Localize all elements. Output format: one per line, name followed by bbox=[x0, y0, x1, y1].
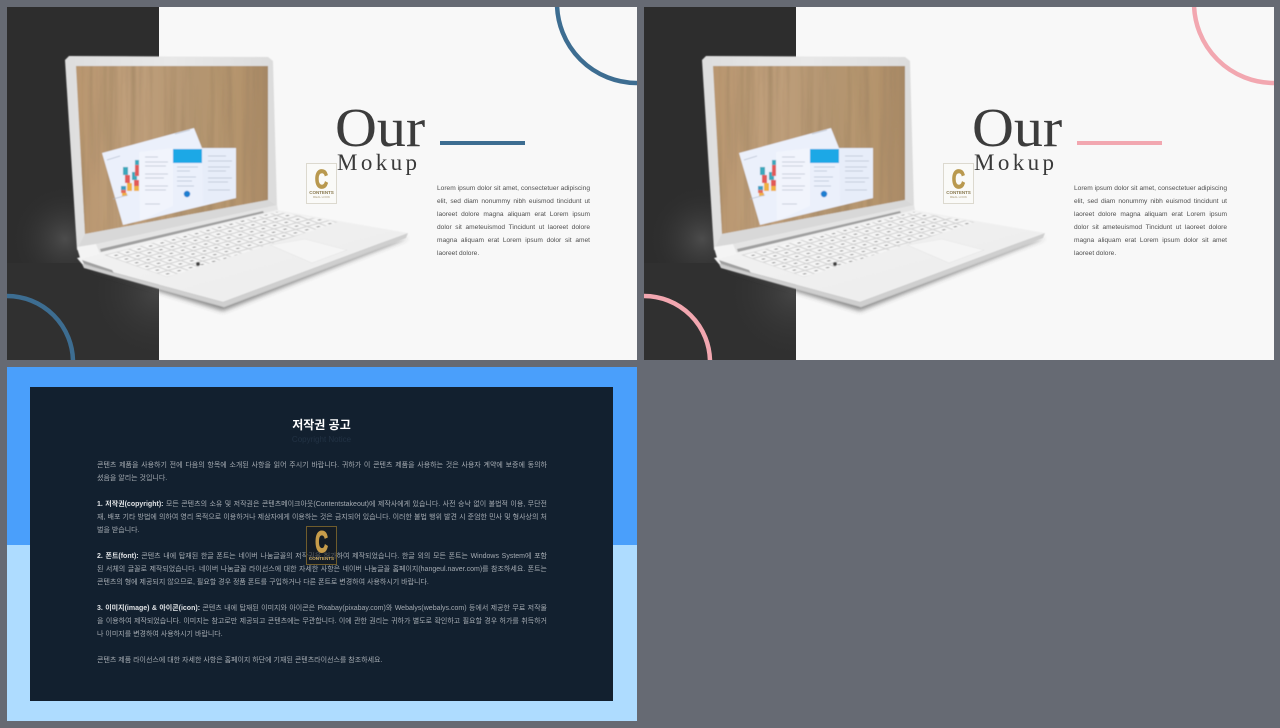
text block: lorem ipsum: elit, sed diam nonummy nibh euismod tincidunt ut bbox=[1074, 198, 1227, 205]
logo stamp: gold: C bbox=[315, 526, 328, 559]
dark notice sheet bbox=[30, 387, 613, 701]
panel: mockup slide, blue theme bbox=[7, 7, 637, 360]
text block: notice body: 콘텐츠의 형에 제공되지 않으므로, 필요할 경우 정품 폰트를 구입하거나 다른 폰트로 변경하여 사용하시기 바랍니다. bbox=[97, 579, 429, 586]
text block: lorem ipsum: elit, sed diam nonummy nibh euismod tincidunt ut bbox=[437, 198, 590, 205]
logo stamp: C bbox=[315, 164, 328, 194]
heading: Mokup: Mokup bbox=[337, 150, 420, 175]
logo stamp: C bbox=[952, 164, 965, 194]
text block: notice body: 1. 저작권(copyright): 모든 콘텐츠의 소유 및 저작권은 콘텐츠메이크아웃(Contentstakeout)에 제작사에게 있습니다. 사전 승낙 없이 불법적 이용, 무단전 bbox=[97, 501, 547, 508]
logo stamp: CONTENTS bbox=[946, 190, 971, 195]
panel: copyright notice bbox=[7, 367, 637, 721]
text block: lorem ipsum: laoreet dolore magna aliquam erat Lorem ipsum bbox=[437, 211, 590, 218]
text block: lorem ipsum: laoreet dolore magna aliquam erat Lorem ipsum bbox=[1074, 211, 1227, 218]
text block: notice body: 콘텐츠 제품 라이선스에 대한 자세한 사항은 홈페이지 하단에 기재된 콘텐츠라이선스를 참조하세요. bbox=[97, 657, 382, 664]
heading: copyright notice: 저작권 공고 bbox=[292, 418, 351, 432]
logo stamp: gold bbox=[306, 526, 337, 565]
text block: lorem ipsum: magna aliquam erat Lorem ipsum dolor sit amet bbox=[437, 237, 590, 244]
heading: Our: Our bbox=[972, 97, 1062, 158]
text block: notice body: 3. 이미지(image) & 아이콘(icon): 콘텐츠 내에 탑재된 이미지와 아이콘은 Pixabay(pixabay.com)와 Webalys(webalys.com) 등에서 제공한 무료 저작물 bbox=[97, 605, 547, 612]
background, arcs and laptop artwork bbox=[644, 7, 1274, 360]
text block: notice body: 재, 배포 기타 방법에 의하여 영리 목적으로 이용하거나 제삼자에게 이용하는 것은 금지되어 있습니다. 이러한 불법 행위 발견 시 준엄한 민사 및 형사상의 처 bbox=[97, 514, 547, 521]
text block: notice body: 2. 폰트(font): 콘텐츠 내에 탑재된 한글 폰트는 네이버 나눔글꼴의 저작권을 허가하여 제작되었습니다. 한글 외의 모든 폰트는 Windows System에 포함 bbox=[97, 553, 547, 560]
panel: mockup slide, pink theme bbox=[644, 7, 1274, 360]
text block: lorem ipsum: Lorem ipsum dolor sit amet, consectetuer adipiscing bbox=[437, 185, 590, 192]
text block: notice body: 벌을 받습니다. bbox=[97, 527, 140, 534]
text block: notice body: 콘텐츠 제품을 사용하기 전에 다음의 항목에 소개된 사항을 읽어 주시기 바랍니다. 귀하가 이 콘텐츠 제품을 사용하는 것은 사용자 계약에 보증에 동의하 bbox=[97, 462, 547, 469]
background, arcs and laptop artwork bbox=[7, 7, 637, 360]
heading: Mokup: Mokup bbox=[974, 150, 1057, 175]
logo stamp bbox=[306, 163, 337, 204]
logo stamp: REAL LOOK bbox=[950, 195, 967, 199]
logo stamp: REAL LOOK bbox=[313, 195, 330, 199]
text block: lorem ipsum: laoreet dolore. bbox=[1074, 250, 1116, 257]
text block: notice body: 나 이미지를 변경하여 사용하시기 바랍니다. bbox=[97, 631, 223, 638]
logo stamp: CONTENTS bbox=[309, 190, 334, 195]
logo stamp bbox=[943, 163, 974, 204]
text block: lorem ipsum: dolor sit ameteuismod Tincidunt ut laoreet dolore bbox=[1074, 224, 1227, 231]
accent line bbox=[1077, 141, 1162, 145]
text block: notice body: 셨음을 알리는 것입니다. bbox=[97, 475, 167, 482]
text block: notice body bbox=[97, 461, 547, 664]
logo stamp: gold: CONTENTS bbox=[309, 556, 334, 561]
text block: notice body: 을 이용하여 제작되었습니다. 이미지는 참고로만 제공되고 콘텐츠에는 무관합니다. 이에 관한 권리는 귀하가 별도로 확인하고 필요할 경우 허가를 취득하거 bbox=[97, 618, 547, 625]
text block: lorem ipsum: magna aliquam erat Lorem ipsum dolor sit amet bbox=[1074, 237, 1227, 244]
text block: lorem ipsum: Lorem ipsum dolor sit amet, consectetuer adipiscing bbox=[1074, 185, 1227, 192]
text block: lorem ipsum: dolor sit ameteuismod Tincidunt ut laoreet dolore bbox=[437, 224, 590, 231]
text block: lorem ipsum: laoreet dolore. bbox=[437, 250, 479, 257]
text block: notice body: 된 서체의 글꼴로 제작되었습니다. 네이버 나눔글꼴 라이선스에 대한 자세한 사항은 네이버 나눔글꼴 홈페이지(hangeul.naver.com)를 참조하세요. 폰트는 bbox=[97, 566, 547, 573]
text block: lorem ipsum bbox=[1074, 185, 1227, 257]
subheading: Copyright Notice bbox=[292, 435, 351, 444]
text block: lorem ipsum bbox=[437, 185, 590, 257]
heading: Our: Our bbox=[335, 97, 425, 158]
accent line bbox=[440, 141, 525, 145]
